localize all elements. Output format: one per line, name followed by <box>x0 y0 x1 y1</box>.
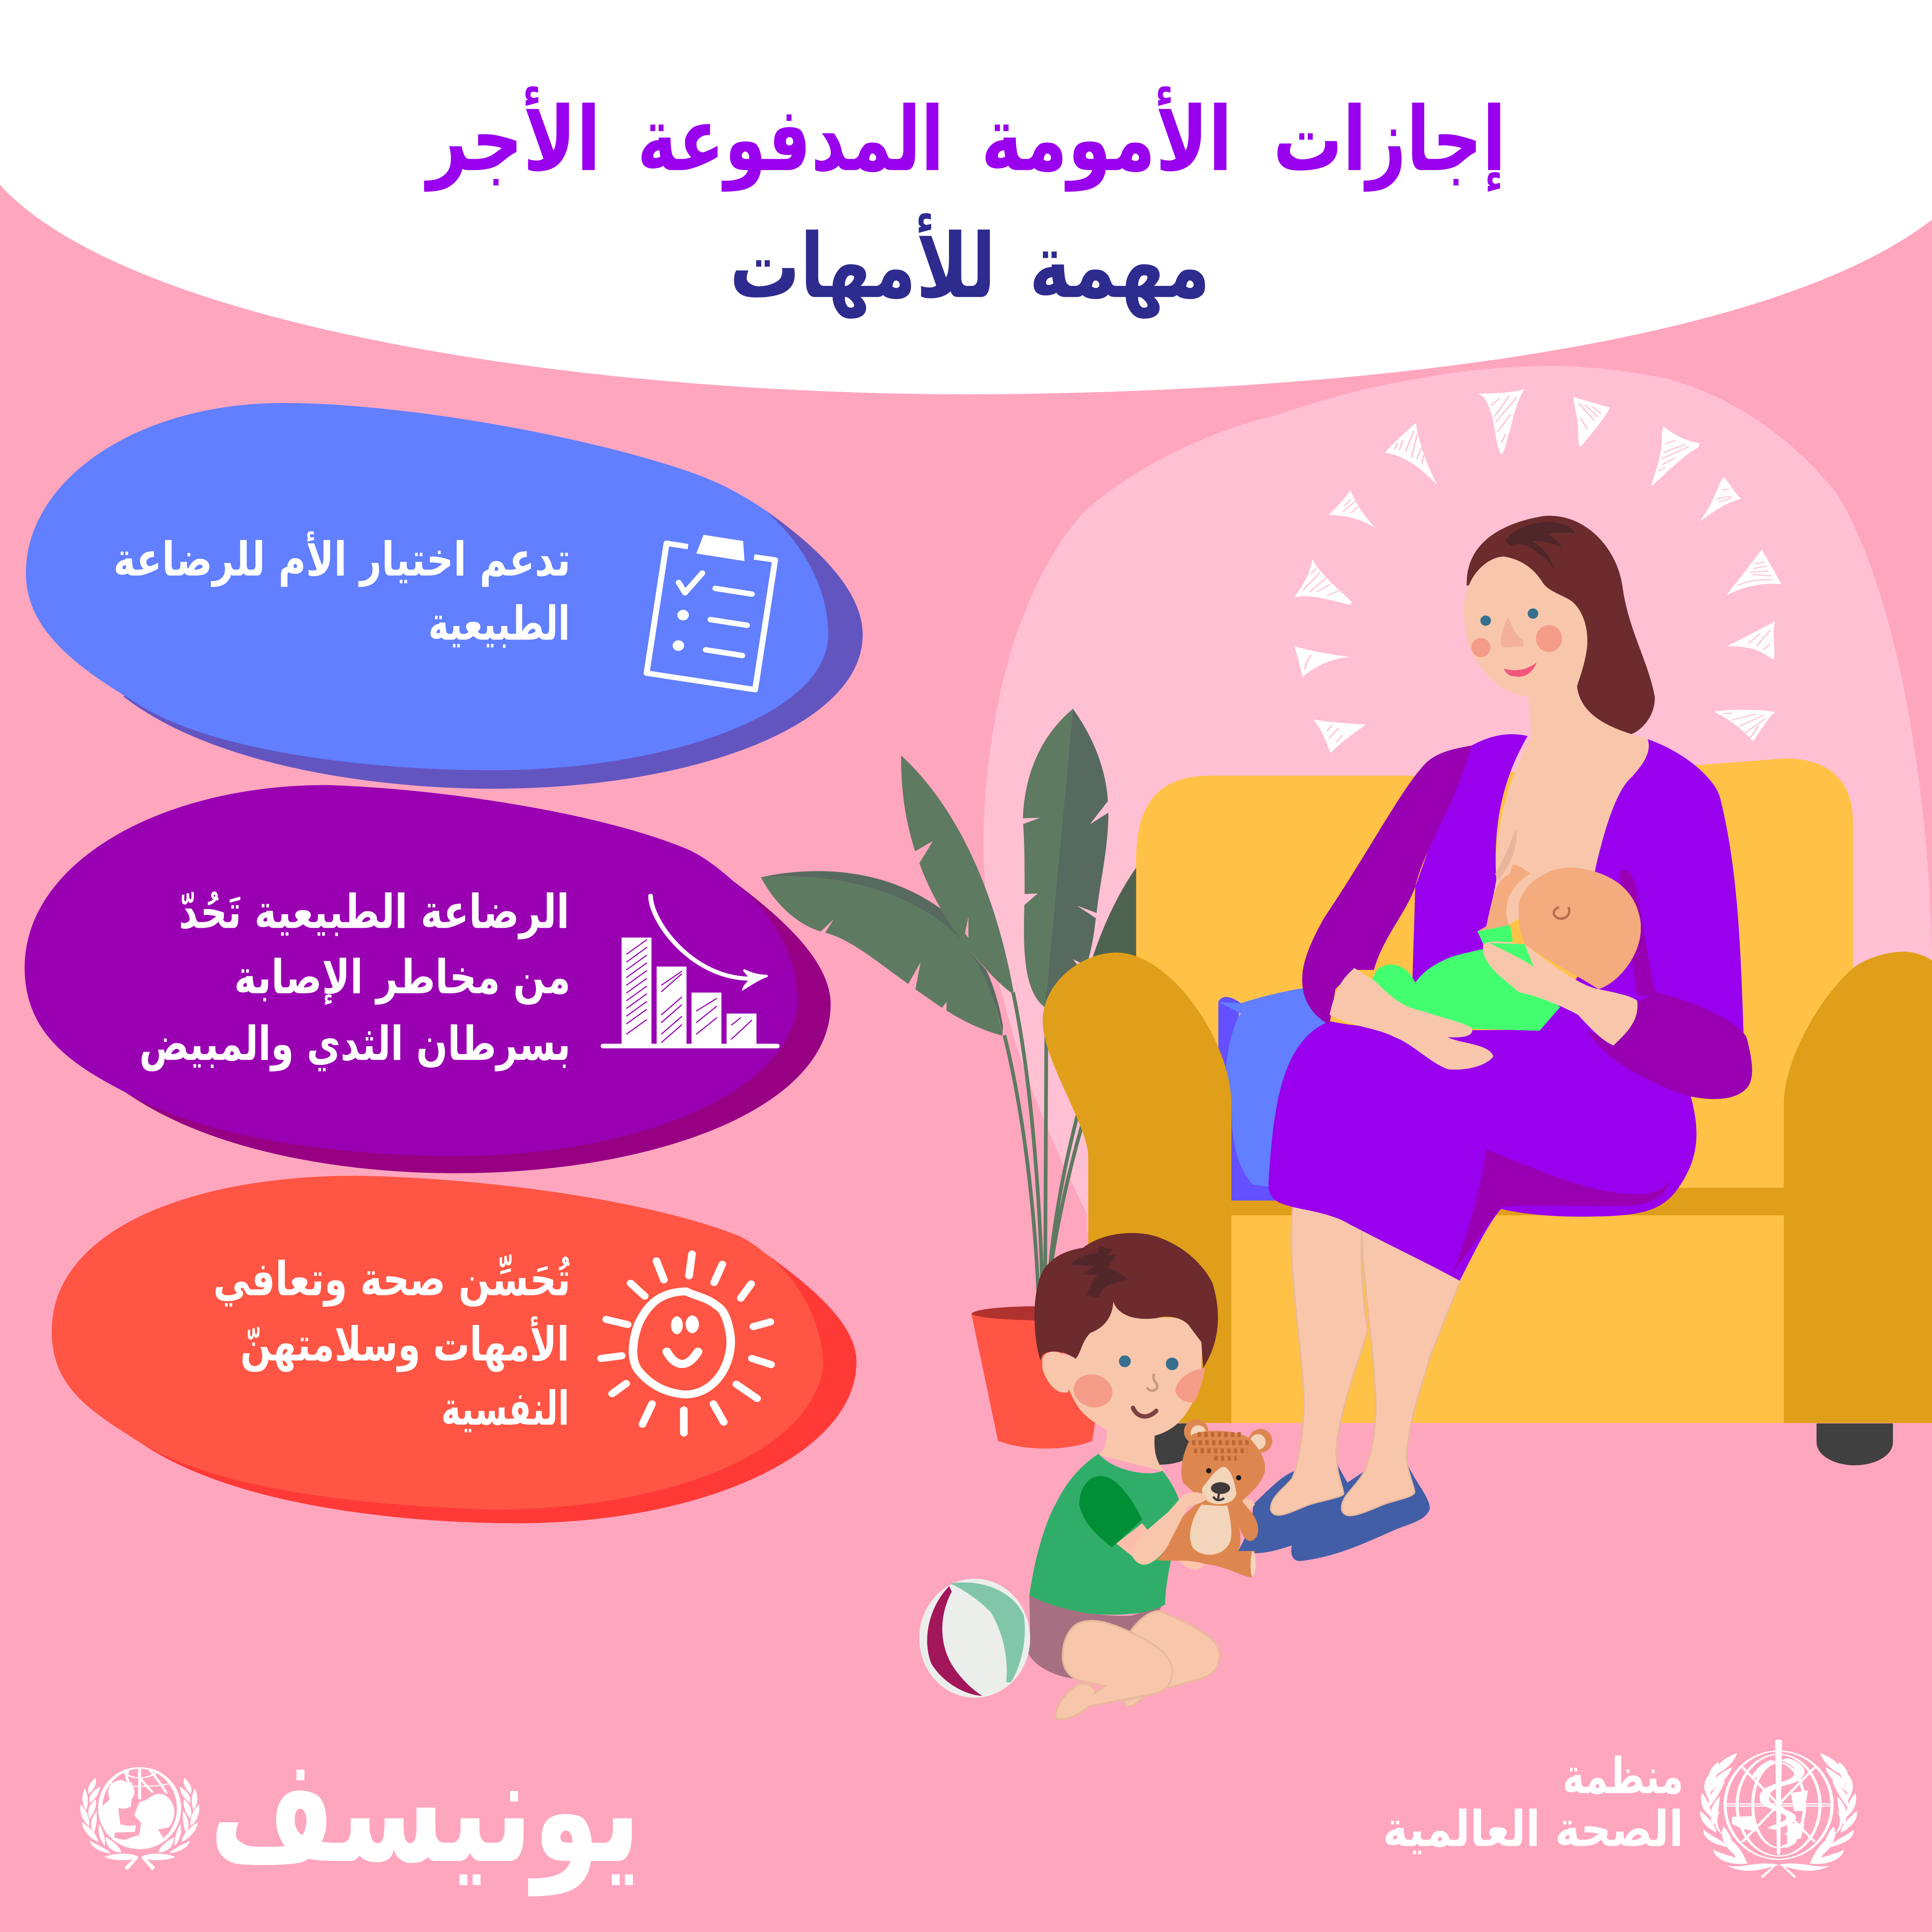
icon: falling bar chart <box>603 896 777 1046</box>
plant pot <box>971 1306 1194 1465</box>
chair wheel <box>1816 1423 1893 1465</box>
logo text: UNICEF: يونيسف <box>209 1726 641 1897</box>
child <box>919 1233 1272 1719</box>
plant <box>761 709 1137 1306</box>
text: purple panel: الرضاعة الطبيعية تَحُدّ <box>179 885 570 940</box>
light pink arch <box>983 366 1932 1232</box>
logo text: WHO <box>1383 1748 1684 1858</box>
text: blue panel: تدعم اختيار الأم للرضاعة <box>113 531 571 587</box>
armchair <box>1043 759 1932 1423</box>
head <box>1034 1233 1218 1438</box>
arm <box>1131 1492 1207 1565</box>
panel: cancer risk <box>25 785 831 1173</box>
baby <box>1372 829 1641 1031</box>
text: red panel: الأمهات وسلامتهنّ <box>240 1316 570 1372</box>
teddy bear <box>1157 1419 1272 1578</box>
title line 2: للأمهات <box>730 213 996 319</box>
hair <box>1467 516 1655 734</box>
text: purple panel: بسرطان الثدي والمبيض <box>139 1017 571 1071</box>
legs <box>1055 1611 1220 1719</box>
text: red panel: تُحَسِّن صحة وتعافي <box>213 1252 571 1307</box>
mother <box>1269 516 1752 1281</box>
text: red panel <box>213 1252 571 1436</box>
title line 1: إجازات <box>1273 88 1506 192</box>
face <box>1464 556 1587 696</box>
mother's legs and slippers <box>1238 1202 1464 1561</box>
title line 1: المدفوعة <box>637 88 944 192</box>
text: blue panel: الطبيعية <box>428 596 570 651</box>
icon: clipboard <box>646 535 775 690</box>
sleeve <box>1079 1476 1142 1547</box>
title line 2: مهمة <box>1029 215 1210 319</box>
logo: WHO emblem <box>1700 1740 1857 1878</box>
panel: mental health <box>52 1176 857 1523</box>
logo: UNICEF emblem <box>80 1768 199 1870</box>
mother's forearm and hand <box>1330 941 1638 1070</box>
title line 1: الأجر <box>424 86 601 192</box>
t-shirt <box>1029 1454 1179 1615</box>
text: purple panel <box>139 885 571 1071</box>
title line 2 <box>730 213 1210 319</box>
text: blue panel <box>113 531 571 651</box>
shorts <box>1027 1595 1162 1679</box>
icon: smiling sun <box>601 1254 771 1433</box>
text: purple panel: من مخاطر الإصابة <box>234 950 571 1005</box>
text: red panel: النفسية <box>441 1381 570 1436</box>
title line 1 <box>424 86 1506 192</box>
neck <box>1098 1427 1164 1471</box>
pillow <box>1218 988 1330 1201</box>
panel: breastfeeding choice <box>26 403 863 789</box>
neck and chest <box>1486 685 1649 938</box>
ball <box>919 1579 1030 1698</box>
dress sleeves <box>1302 746 1752 1099</box>
logo text: WHO: منظمة <box>1563 1748 1684 1805</box>
title line 1: الأمومة <box>981 86 1232 192</box>
sunburst triangles and hair tuft <box>1294 389 1781 753</box>
dress <box>1269 734 1743 1281</box>
white title header <box>0 0 1932 395</box>
logo text: WHO: الصحة العالمية <box>1383 1801 1684 1858</box>
